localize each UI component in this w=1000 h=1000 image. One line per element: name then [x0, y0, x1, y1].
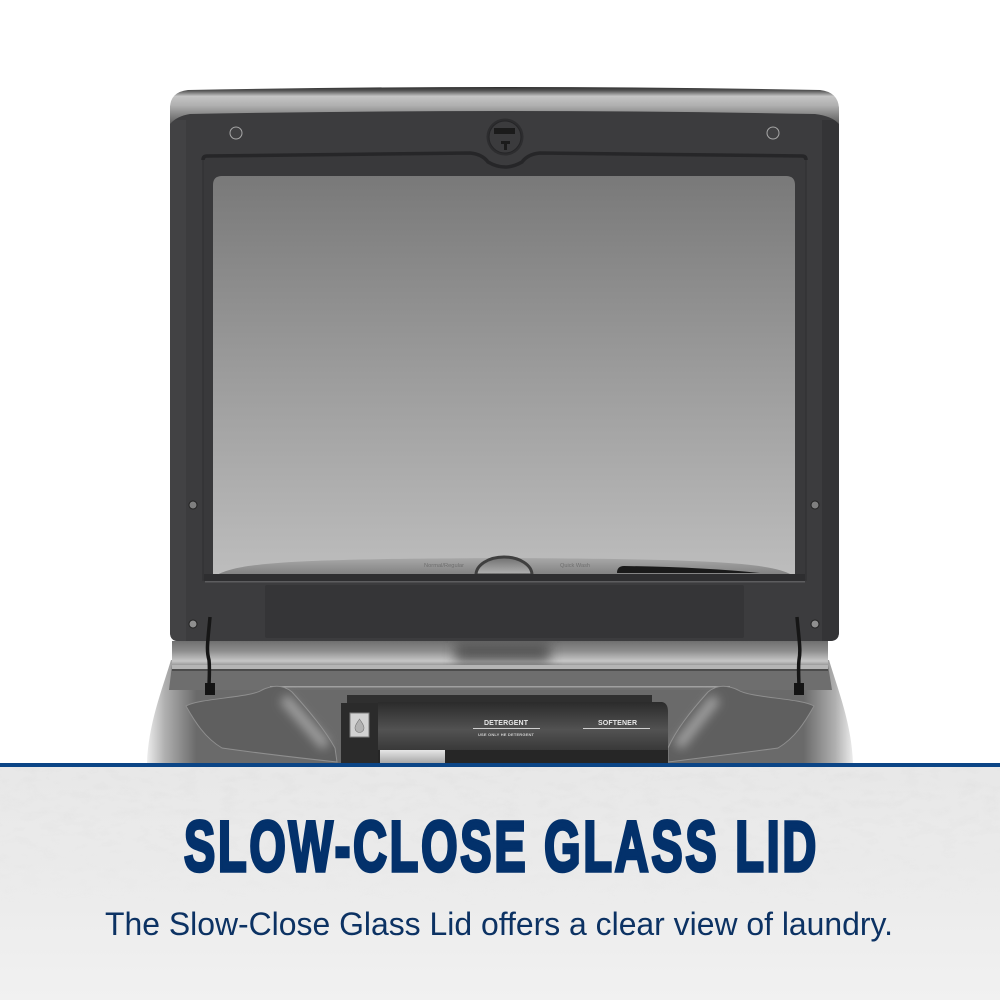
open lid [170, 87, 839, 641]
top left bumper [230, 127, 242, 139]
left scoop [186, 686, 337, 762]
glass window [213, 176, 795, 575]
icon: water drop button [350, 713, 369, 737]
control console seen through the glass: Normal/Regular [424, 563, 464, 569]
softener label [583, 720, 650, 729]
window recess [203, 153, 806, 580]
lower lid panel [265, 585, 744, 638]
screw lower right [811, 620, 819, 628]
detergent label: DETERGENT [484, 720, 529, 727]
screw upper left [189, 501, 197, 509]
detergent label: USE ONLY HE DETERGENT [478, 732, 535, 737]
washer body below the lid [147, 641, 853, 764]
control console seen through the glass: Quick Wash [560, 563, 590, 569]
rear deck band [172, 641, 828, 666]
description: The Slow-Close Glass Lid offers a clear view of laundry. [105, 906, 893, 942]
drawer handle [380, 750, 445, 763]
bottom frame bar [204, 574, 805, 581]
blue rule [0, 763, 1000, 767]
cabinet side shell [147, 660, 853, 764]
right scoop [668, 686, 814, 762]
trim strip [169, 665, 832, 690]
right hinge [794, 617, 804, 695]
screw upper right [811, 501, 819, 509]
screw lower left [189, 620, 197, 628]
handle notch [486, 118, 524, 156]
lid frame [170, 88, 839, 641]
chrome top edge [170, 87, 839, 124]
control console seen through the glass [217, 557, 792, 575]
dispenser drawer [341, 695, 668, 764]
detergent label [473, 720, 540, 737]
caption panel [0, 763, 1000, 1000]
left hinge [205, 617, 215, 695]
title: SLOW-CLOSE GLASS LID [184, 807, 816, 886]
top right bumper [767, 127, 779, 139]
softener label: SOFTENER [598, 720, 637, 727]
